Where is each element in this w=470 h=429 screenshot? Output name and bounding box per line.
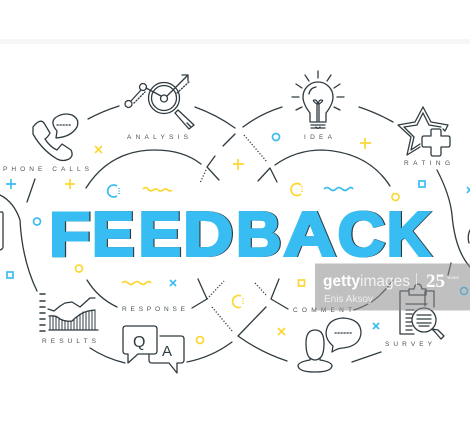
icon: rating star — [398, 107, 450, 156]
title: FEEDBACK: E — [140, 200, 182, 270]
icon: idea light bulb — [292, 71, 344, 128]
label: analysis: ANALYSIS — [127, 134, 189, 141]
blue accents — [6, 134, 470, 329]
icon: Q and A bubbles: A — [162, 343, 172, 360]
icon: Q and A bubbles: Q — [133, 334, 145, 351]
title: FEEDBACK: A — [284, 200, 336, 270]
label: idea: IDEA — [304, 134, 333, 141]
title: FEEDBACK: E — [92, 200, 134, 270]
dotted connectors — [200, 135, 267, 332]
connecting arcs — [0, 106, 470, 363]
title: FEEDBACK: E — [93, 200, 135, 270]
title: FEEDBACK: K — [387, 200, 430, 270]
watermark: getty images: Enis Aksoy — [324, 294, 373, 305]
label: comment: COMMENT — [293, 307, 352, 314]
icon: analysis magnifier — [125, 75, 194, 129]
title: FEEDBACK: C — [338, 200, 385, 270]
icon: phone calls — [33, 114, 78, 160]
icon: results chart — [40, 294, 98, 331]
title: FEEDBACK: D — [183, 200, 233, 270]
yellow accents — [65, 138, 399, 344]
title: FEEDBACK: B — [236, 200, 281, 270]
title: FEEDBACK: K — [388, 200, 432, 270]
label: phone calls: PHONE CALLS — [3, 166, 90, 173]
watermark: getty images: 25 — [426, 271, 445, 292]
title: FEEDBACK — [49, 200, 432, 270]
title: FEEDBACK: D — [184, 200, 234, 270]
title: FEEDBACK: F — [50, 200, 91, 270]
watermark: getty images — [315, 264, 470, 310]
label: rating: RATING — [404, 160, 450, 167]
icon: person with speech bubble — [298, 318, 361, 372]
top grey band — [0, 39, 470, 44]
title: FEEDBACK: E — [138, 200, 181, 270]
label: results: RESULTS — [42, 338, 97, 345]
watermark: getty images: YEARS — [447, 276, 460, 280]
label: response: RESPONSE — [122, 306, 186, 313]
watermark: getty images: gettyimages — [323, 273, 410, 290]
title: FEEDBACK: A — [285, 200, 337, 270]
title: FEEDBACK: C — [339, 200, 386, 270]
icon: Q and A bubbles — [123, 326, 184, 373]
label: survey: SURVEY — [385, 341, 433, 348]
title: FEEDBACK: B — [237, 200, 282, 270]
title: FEEDBACK: F — [49, 200, 90, 270]
icon: survey clipboard — [400, 284, 444, 339]
